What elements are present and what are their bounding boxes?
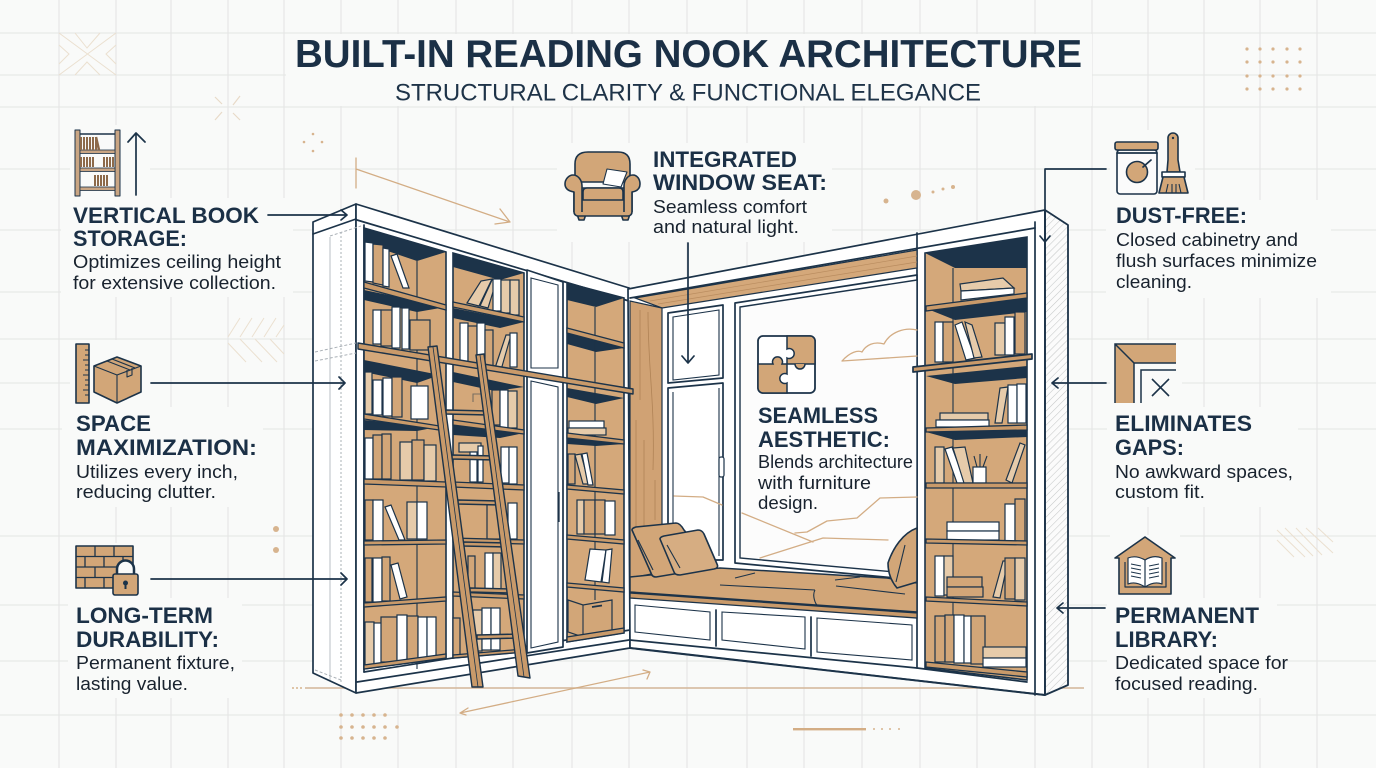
leader: dust-free: [1040, 169, 1106, 242]
tan dimension arrow: floor: [460, 670, 650, 715]
heading and text: integrated window seat: and natural light.: [653, 216, 799, 237]
icon: bookshelf with up arrow: [75, 130, 145, 196]
heading and text: vertical book storage: Optimizes ceiling height: [73, 251, 281, 272]
heading and text: permanent library: focused reading.: [1115, 673, 1258, 694]
heading and text: permanent library: [1115, 603, 1288, 694]
icon: puzzle: [758, 336, 815, 393]
window wall shell: [628, 210, 1068, 695]
heading and text: dust-free: DUST-FREE:: [1116, 203, 1247, 228]
leader: space maximization: [151, 377, 345, 389]
heading and text: dust-free: flush surfaces minimize: [1116, 250, 1317, 271]
leader: integrated window seat: [682, 243, 694, 363]
leader: long-term durability: [151, 573, 347, 585]
heading and text: space maximization: [76, 411, 257, 502]
heading and text: seamless aesthetic: Blends architecture: [758, 451, 913, 472]
heading and text: integrated window seat: WINDOW SEAT:: [653, 170, 827, 195]
window seat cushion and drawers: [630, 568, 917, 660]
heading and text: vertical book storage: [73, 203, 281, 293]
heading and text: seamless aesthetic: [757, 403, 913, 513]
heading and text: space maximization: SPACE: [76, 411, 151, 436]
heading and text: dust-free: Closed cabinetry and: [1116, 229, 1298, 250]
glazed cabinet door: [527, 270, 563, 653]
leader: permanent library: [1057, 603, 1105, 613]
heading and text: permanent library: Dedicated space for: [1115, 652, 1288, 673]
heading and text: seamless aesthetic: SEAMLESS: [758, 403, 878, 428]
heading and text: vertical book storage: for extensive collection.: [73, 272, 276, 293]
heading and text: seamless aesthetic: design.: [758, 492, 818, 513]
heading and text: permanent library: LIBRARY:: [1115, 627, 1218, 652]
heading and text: seamless aesthetic: with furniture: [757, 472, 871, 493]
heading and text: eliminates gaps: [1115, 411, 1293, 502]
heading and text: space maximization: MAXIMIZATION:: [76, 435, 257, 460]
heading and text: long-term durability: DURABILITY:: [76, 627, 219, 652]
heading and text: eliminates gaps: ELIMINATES: [1115, 411, 1252, 436]
icon: paint can and brush: [1115, 133, 1188, 194]
window frames and view: [668, 275, 917, 580]
right bookcase: [913, 237, 1032, 680]
leader: vertical book storage: [268, 210, 347, 220]
built-in nook illustration: [313, 204, 1068, 695]
heading and text: long-term durability: Permanent fixture,: [76, 652, 235, 673]
leader: eliminates gaps: [1052, 378, 1106, 388]
heading and text: long-term durability: LONG-TERM: [76, 603, 213, 628]
heading and text: seamless aesthetic: AESTHETIC:: [758, 427, 890, 452]
heading and text: permanent library: PERMANENT: [1115, 603, 1259, 628]
bookcase column 2: [453, 253, 524, 658]
tan dimension arrow: top: [356, 158, 510, 224]
heading and text: integrated window seat: Seamless comfort: [653, 196, 807, 217]
heading and text: dust-free: cleaning.: [1116, 271, 1192, 292]
heading and text: integrated window seat: [653, 147, 827, 237]
heading and text: vertical book storage: STORAGE:: [73, 226, 187, 251]
heading and text: eliminates gaps: custom fit.: [1115, 481, 1205, 502]
icon: house with open book: [1115, 537, 1175, 594]
wood soffit and side wall: [630, 250, 917, 578]
icon: brick wall with padlock: [76, 546, 138, 595]
tan floor baseline: [305, 687, 1084, 689]
heading and text: integrated window seat: INTEGRATED: [653, 147, 797, 172]
title: BUILT-IN READING NOOK ARCHITECTURE: [295, 33, 1082, 76]
heading and text: eliminates gaps: No awkward spaces,: [1115, 461, 1293, 482]
heading and text: eliminates gaps: GAPS:: [1115, 435, 1184, 460]
heading and text: space maximization: Utilizes every inch,: [76, 461, 238, 482]
heading and text: space maximization: reducing clutter.: [76, 481, 216, 502]
icon: armchair: [565, 152, 640, 220]
library rail: [358, 343, 633, 394]
left cabinet shell: [313, 204, 630, 693]
heading and text: long-term durability: [76, 603, 235, 694]
subtitle: STRUCTURAL CLARITY & FUNCTIONAL ELEGANCE: [395, 80, 981, 106]
heading and text: vertical book storage: VERTICAL BOOK: [73, 203, 260, 228]
rolling ladder: [428, 346, 530, 687]
icon: corner joint with x mark: [1115, 344, 1176, 403]
bookcase column 3: [567, 283, 624, 642]
cushions: [632, 523, 917, 588]
icon: ruler and box: [76, 344, 141, 403]
bookcase column 1: [364, 228, 446, 669]
heading and text: long-term durability: lasting value.: [76, 673, 188, 694]
heading and text: dust-free: [1116, 203, 1317, 292]
